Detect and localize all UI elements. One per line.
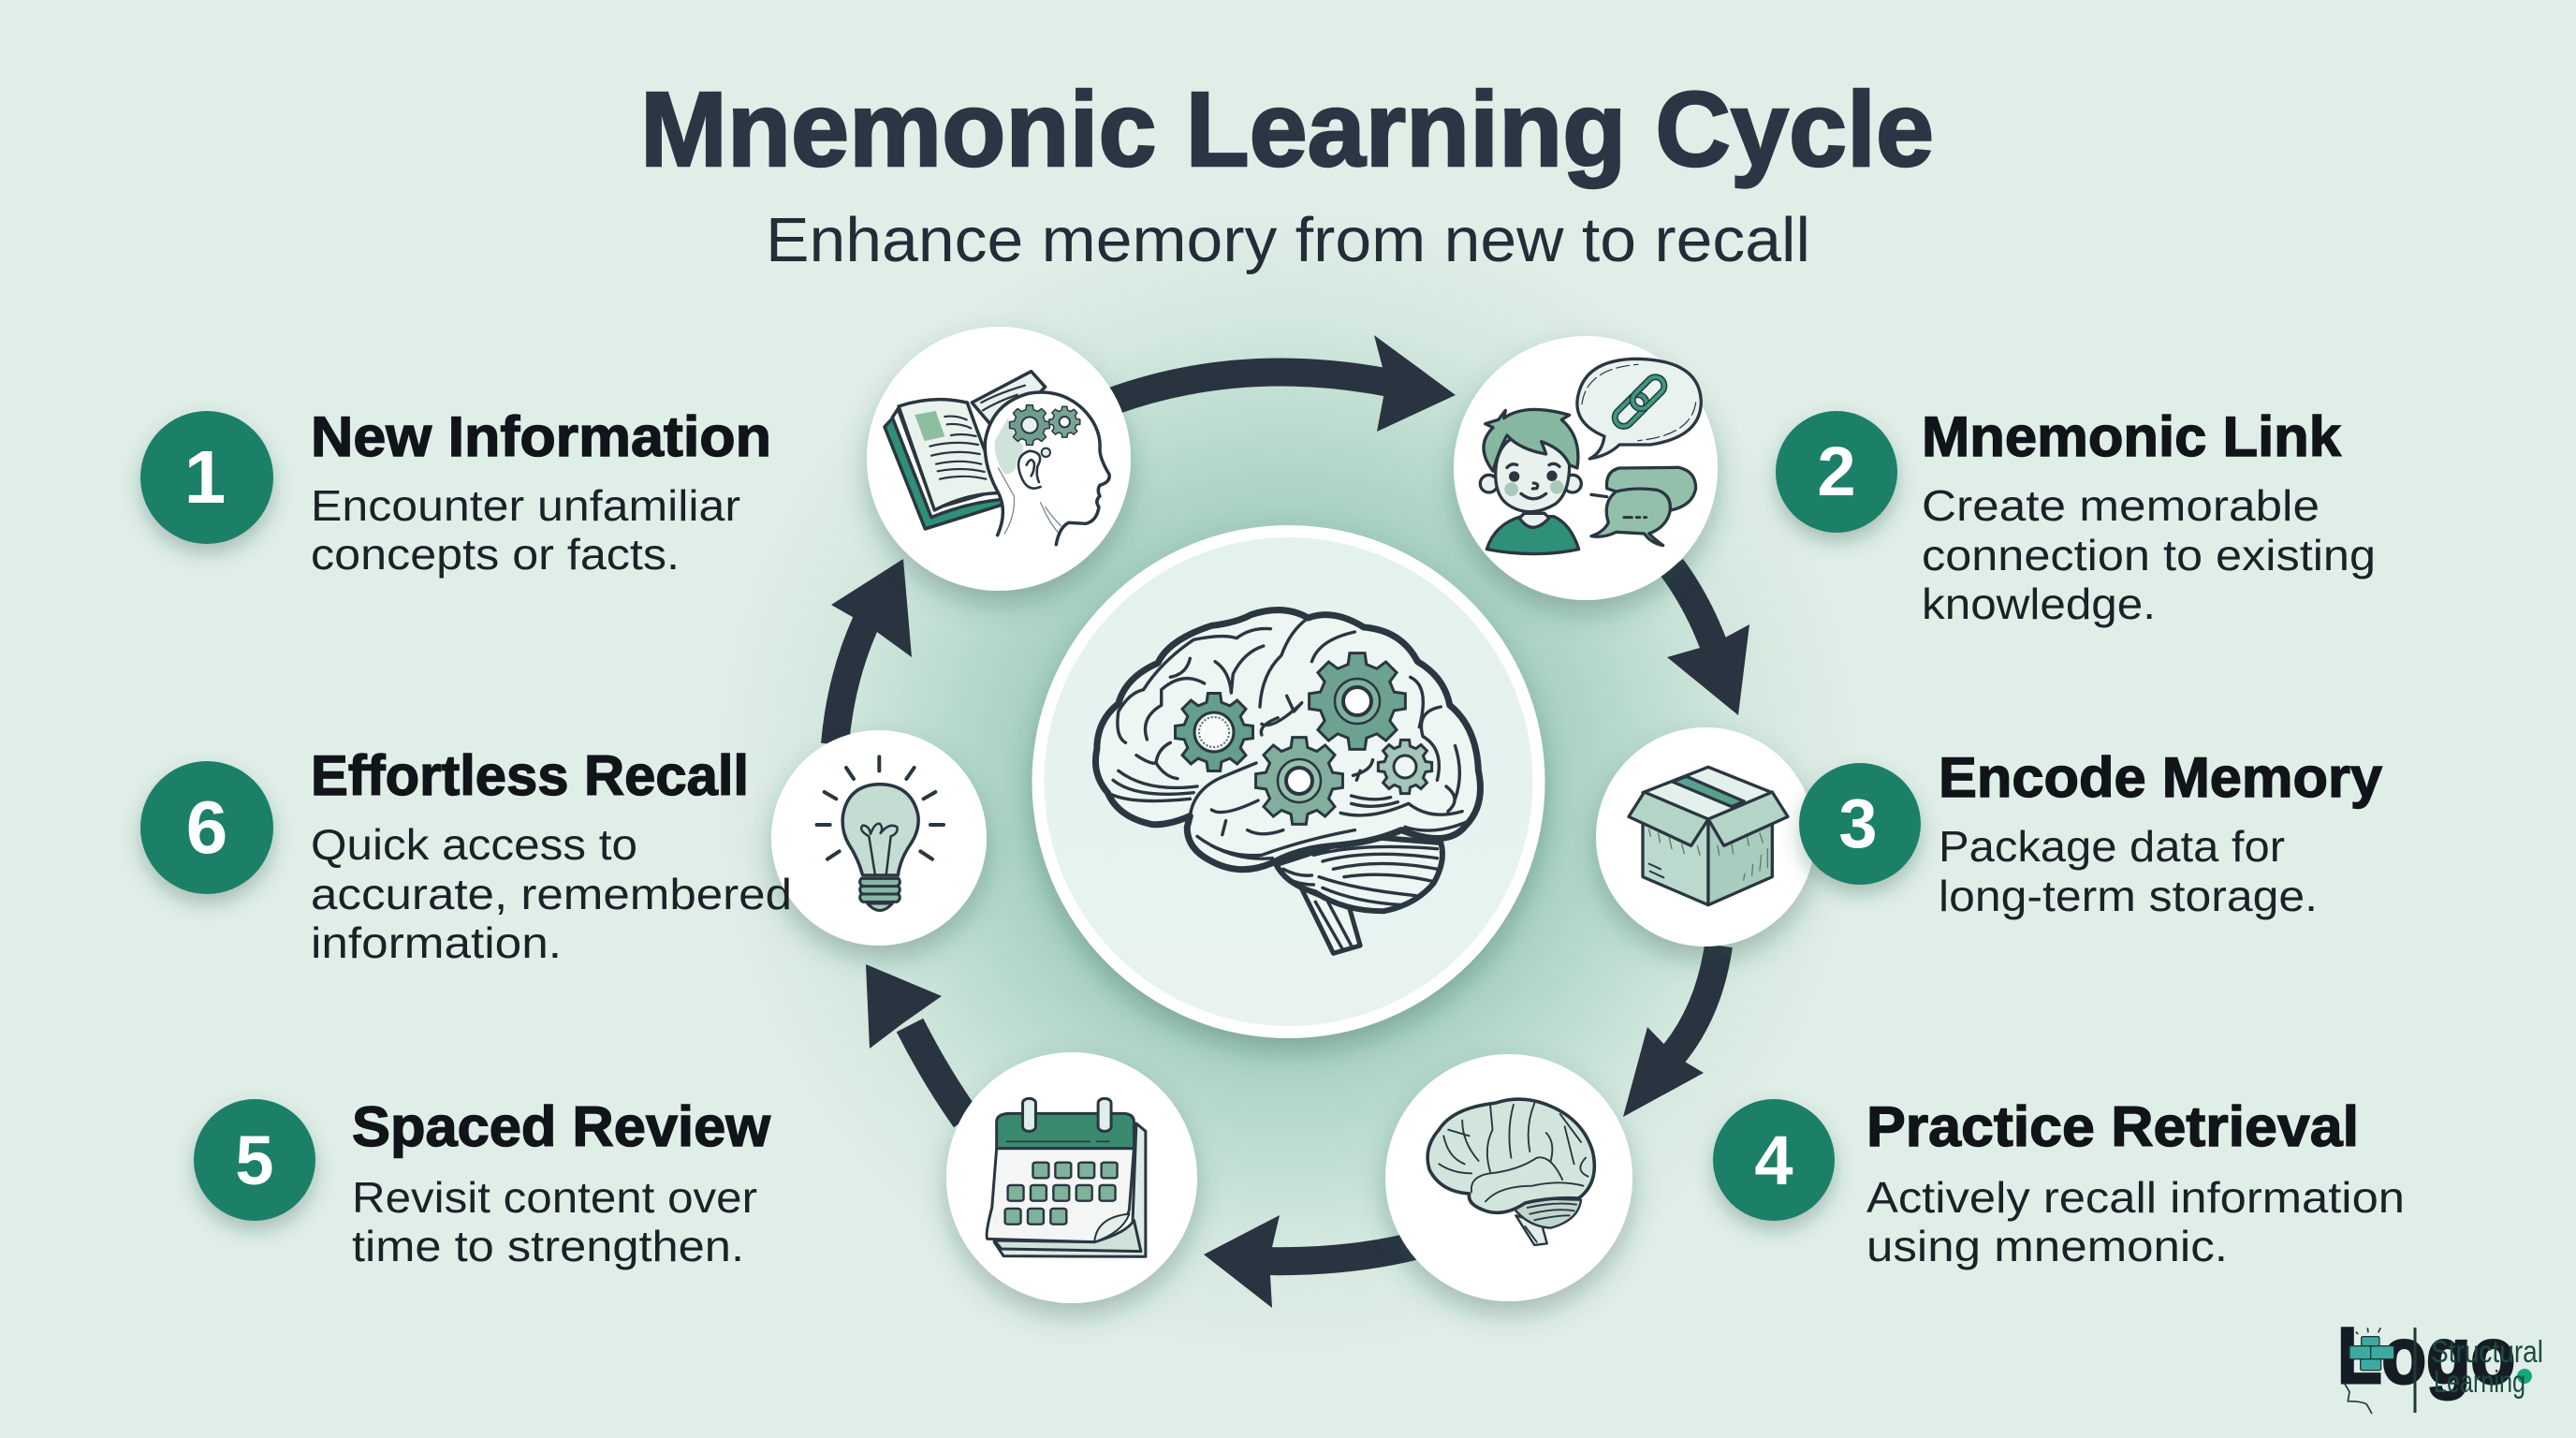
- step 3 text: [1799, 746, 2383, 920]
- step 2 description: connection to existing: [1922, 531, 2376, 580]
- step 3 description: [1939, 822, 2318, 920]
- step 1 description: concepts or facts.: [311, 530, 680, 579]
- step 6 description: [311, 820, 792, 967]
- icon: brain with gears: [1095, 610, 1480, 953]
- logo: Learning: [2434, 1364, 2525, 1399]
- arrow: step 1 to step 2: [1114, 335, 1456, 432]
- step 4 icon circle: brain: [1385, 1054, 1632, 1301]
- step 3 number badge: [1799, 763, 1921, 885]
- step 6 icon circle: light bulb: [771, 730, 987, 946]
- step 2 description: knowledge.: [1922, 580, 2156, 628]
- step 6 heading: Effortless Recall: [311, 744, 749, 807]
- arrow: step 6 to step 1: [831, 559, 912, 744]
- step 5 icon circle: calendar: [946, 1052, 1197, 1303]
- step 2 number badge: [1776, 411, 1897, 533]
- step 1 text: [140, 405, 771, 579]
- step 1 number badge: [140, 411, 273, 544]
- step 5 description: time to strengthen.: [352, 1222, 744, 1270]
- step 6 description: Quick access to: [311, 820, 637, 869]
- title: Mnemonic Learning Cycle: [640, 70, 1934, 188]
- step 5 description: [352, 1173, 757, 1270]
- step 2 description: [1922, 481, 2376, 628]
- step 5 heading: Spaced Review: [352, 1095, 770, 1158]
- arrow: step 4 to step 5: [1204, 1215, 1418, 1308]
- step 2 icon circle: child and speech bubbles: [1454, 336, 1718, 600]
- arrow: step 5 to step 6: [866, 964, 966, 1119]
- step 3 description: Package data for: [1939, 822, 2285, 871]
- step 2 text: [1776, 405, 2376, 628]
- arrow: step 2 to step 3: [1667, 567, 1749, 715]
- step 6 description: information.: [311, 918, 562, 967]
- step 5 number badge: [194, 1099, 315, 1221]
- step 4 number badge: [1713, 1099, 1835, 1221]
- central brain panel: [1032, 525, 1544, 1038]
- step 2 heading: Mnemonic Link: [1922, 405, 2342, 468]
- step 5 number badge: 5: [235, 1122, 274, 1199]
- step 4 heading: Practice Retrieval: [1866, 1095, 2359, 1158]
- step 3 heading: Encode Memory: [1939, 746, 2383, 809]
- step 4 description: using mnemonic.: [1866, 1222, 2228, 1270]
- step 4 text: [1713, 1095, 2405, 1270]
- step 5 text: [194, 1095, 770, 1270]
- step 6 number badge: 6: [186, 785, 227, 869]
- step 2 number badge: 2: [1817, 433, 1856, 510]
- step 6 description: accurate, remembered: [311, 870, 792, 918]
- step 1 description: [311, 481, 740, 579]
- step 1 description: Encounter unfamiliar: [311, 481, 740, 530]
- logo: Structural: [2431, 1334, 2543, 1369]
- step 1 icon circle: book and head: [867, 327, 1131, 591]
- step 5 description: Revisit content over: [352, 1173, 757, 1222]
- step 4 description: [1866, 1173, 2405, 1270]
- step 1 number badge: 1: [184, 435, 226, 519]
- step 4 description: Actively recall information: [1866, 1173, 2405, 1222]
- step 3 description: long-term storage.: [1939, 872, 2318, 920]
- subtitle: Enhance memory from new to recall: [766, 205, 1810, 275]
- arrow: step 3 to step 4: [1623, 946, 1719, 1117]
- step 3 icon circle: open box: [1596, 727, 1815, 946]
- logo: Logo: [2337, 1312, 2515, 1400]
- step 6 number badge: [140, 761, 273, 894]
- step 1 heading: New Information: [311, 405, 771, 468]
- step 3 number badge: 3: [1838, 785, 1878, 862]
- step 4 number badge: 4: [1754, 1122, 1793, 1199]
- step 6 text: [140, 744, 792, 967]
- step 2 description: Create memorable: [1922, 481, 2320, 530]
